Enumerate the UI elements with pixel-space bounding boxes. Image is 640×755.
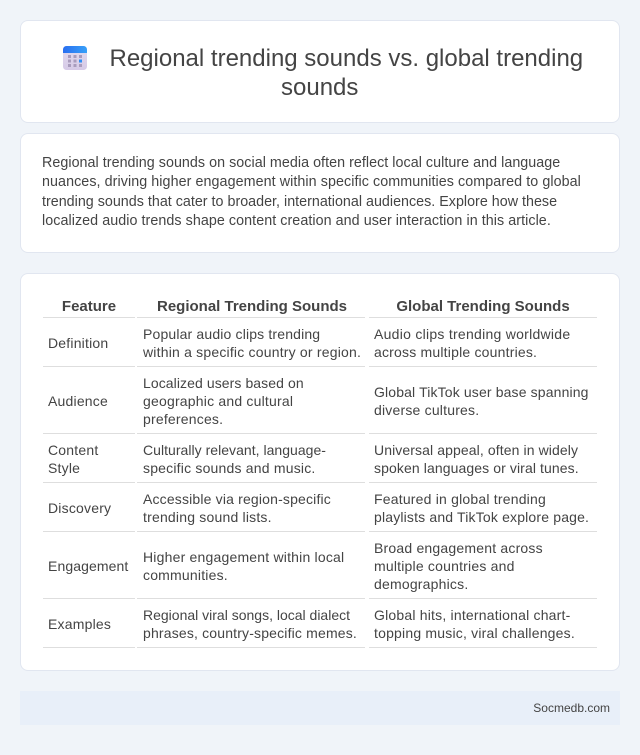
row: audience: diverse cultures.: [374, 402, 479, 418]
row: audience: Audience: [48, 393, 108, 409]
row: content style: Style: [48, 460, 80, 476]
intro text: Regional trending sounds on social media often reflect local culture and language: [42, 155, 560, 171]
row: examples: topping music, viral challenges.: [374, 625, 575, 641]
row: audience: Localized users based on: [143, 375, 304, 391]
table header: Feature: [62, 298, 116, 315]
row: discovery: playlists and TikTok explore page.: [374, 509, 589, 525]
row: discovery: [48, 491, 589, 525]
row: content style: spoken languages or viral tunes.: [374, 460, 579, 476]
row: engagement: Broad engagement across: [374, 540, 543, 556]
row: discovery: Accessible via region-specific: [143, 491, 331, 507]
row: engagement: [48, 540, 543, 592]
intro text: localized audio trends shape content creation and user interaction in this article.: [42, 213, 551, 229]
title line 1: Regional trending sounds vs. global trending: [110, 45, 583, 72]
row: content style: Content: [48, 442, 98, 458]
row: examples: Regional viral songs, local dialect: [143, 607, 350, 623]
table header: Regional Trending Sounds: [157, 298, 347, 315]
title line 2: sounds: [281, 74, 358, 101]
row: engagement: multiple countries and: [374, 558, 515, 574]
icon: calendar: [63, 46, 87, 70]
intro text: [42, 155, 581, 229]
row: content style: Culturally relevant, language-: [143, 442, 326, 458]
row: engagement: Engagement: [48, 558, 128, 574]
row: content style: specific sounds and music.: [143, 460, 316, 476]
row: content style: Universal appeal, often in widely: [374, 442, 578, 458]
row: examples: phrases, country-specific memes.: [143, 625, 357, 641]
row: audience: preferences.: [143, 411, 223, 427]
footer bar: [20, 691, 620, 725]
row: definition: Audio clips trending worldwide: [374, 326, 570, 342]
row: audience: Global TikTok user base spanning: [374, 384, 589, 400]
intro text: nuances, driving higher engagement within specific communities compared to global: [42, 174, 581, 190]
row: engagement: Higher engagement within local: [143, 549, 344, 565]
row: discovery: Discovery: [48, 500, 111, 516]
row: audience: [48, 375, 589, 427]
footer credit: Socmedb.com: [533, 701, 610, 715]
row: examples: [48, 607, 575, 641]
panel: title card: [20, 20, 620, 123]
panel: comparison table: [20, 273, 620, 671]
row: definition: across multiple countries.: [374, 344, 537, 360]
table header: Global Trending Sounds: [396, 298, 570, 315]
row: definition: within a specific country or region.: [143, 344, 361, 360]
row: examples: Examples: [48, 616, 111, 632]
row: definition: [48, 326, 570, 360]
panel: intro: [20, 133, 620, 253]
row: discovery: Featured in global trending: [374, 491, 546, 507]
row: engagement: communities.: [143, 567, 228, 583]
intro text: trending sounds that cater to broader, international audiences. Explore how these: [42, 194, 557, 210]
row: definition: Definition: [48, 335, 108, 351]
row: content style: [48, 442, 579, 476]
row: audience: geographic and cultural: [143, 393, 293, 409]
row: engagement: demographics.: [374, 576, 468, 592]
row: discovery: trending sound lists.: [143, 509, 272, 525]
row: definition: Popular audio clips trending: [143, 326, 320, 342]
table header: [62, 298, 570, 315]
row: examples: Global hits, international chart-: [374, 607, 570, 623]
